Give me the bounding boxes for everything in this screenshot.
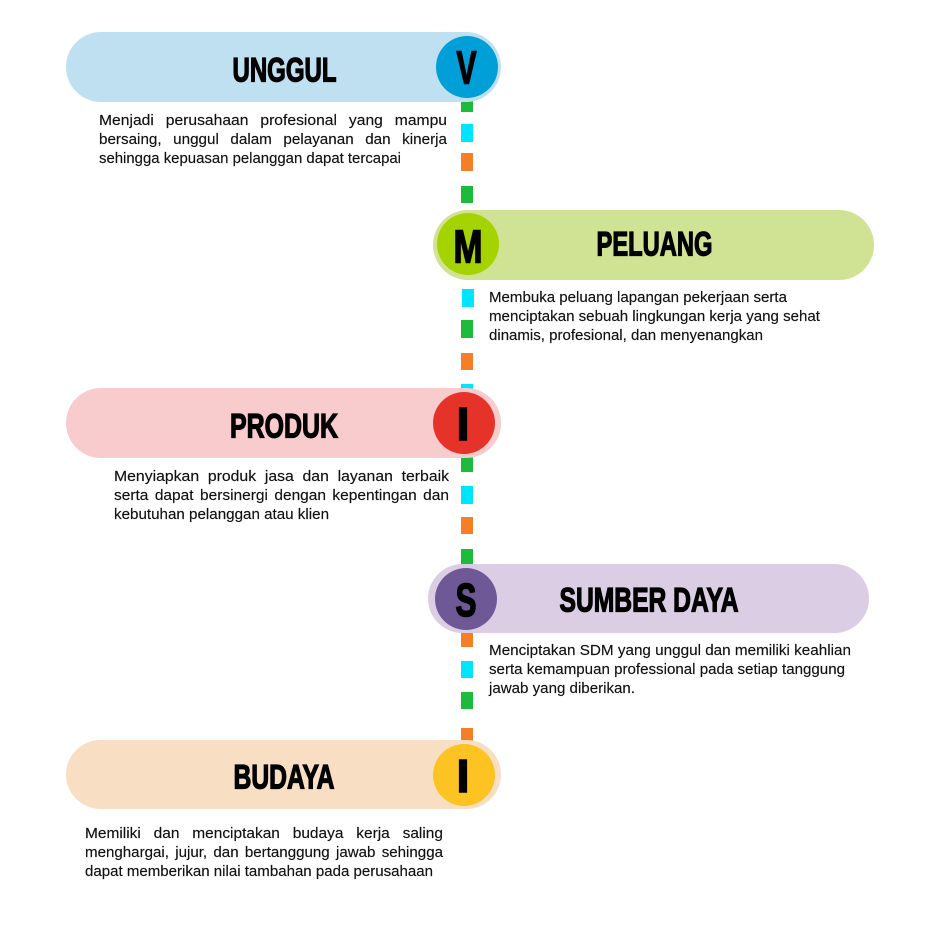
text: peluang description: Membuka peluang lapangan pekerjaan serta [489,290,788,306]
icon: letter I: I [457,398,469,450]
heading: peluang: PELUANG [596,225,712,263]
panel: peluang [433,210,874,344]
text: sumber daya description: Menciptakan SDM yang unggul dan memiliki keahlian [489,643,851,659]
icon: letter V: V [456,42,477,94]
text: unggul description [99,113,448,167]
heading: unggul: UNGGUL [232,51,336,89]
text: sumber daya description [488,643,851,697]
text: sumber daya description: jawab yang diberikan. [488,681,635,697]
text: unggul description: sehingga kepuasan pelanggan dapat tercapai [99,151,401,167]
heading: produk: PRODUK [230,407,338,445]
text: produk description: serta dapat bersinergi dengan kepentingan dan [114,488,449,504]
text: produk description: kebutuhan pelanggan atau klien [114,507,329,523]
text: produk description: Menyiapkan produk jasa dan layanan terbaik [114,469,450,485]
icon: letter I [433,392,495,454]
icon: letter I: I [457,750,469,802]
text: unggul description: Menjadi perusahaan profesional yang mampu [99,113,447,129]
pill: budaya [66,740,501,809]
heading: sumber daya: SUMBER DAYA [560,581,738,619]
text: sumber daya description: serta kemampuan professional pada setiap tanggung [489,662,845,678]
icon: letter V [436,36,498,98]
dashed timeline line [461,100,474,742]
icon: letter M: M [454,220,482,272]
text: budaya description: dapat memberikan nilai tambahan pada perusahaan [85,864,433,880]
text: budaya description: menghargai, jujur, dan bertanggung jawab sehingga [85,845,444,861]
panel: budaya [66,740,501,880]
icon: letter S [435,568,497,630]
text: peluang description: menciptakan sebuah lingkungan kerja yang sehat [489,309,820,325]
panel: produk [66,388,501,523]
icon: letter M [437,213,499,275]
panel: unggul [66,32,501,167]
text: budaya description [85,826,444,880]
text: unggul description: bersaing, unggul dalam pelayanan dan kinerja [99,132,448,148]
heading: budaya: BUDAYA [234,758,334,796]
icon: letter I [433,744,495,806]
pill: unggul [66,32,501,102]
text: peluang description: dinamis, profesional, dan menyenangkan [489,328,763,344]
panel: sumber daya [428,564,869,697]
text: peluang description [489,290,820,344]
text: produk description [114,469,450,523]
text: budaya description: Memiliki dan menciptakan budaya kerja saling [85,826,443,842]
pill: sumber daya [428,564,869,633]
pill: produk [66,388,501,458]
icon: letter S: S [456,574,476,626]
pill: peluang [433,210,874,280]
